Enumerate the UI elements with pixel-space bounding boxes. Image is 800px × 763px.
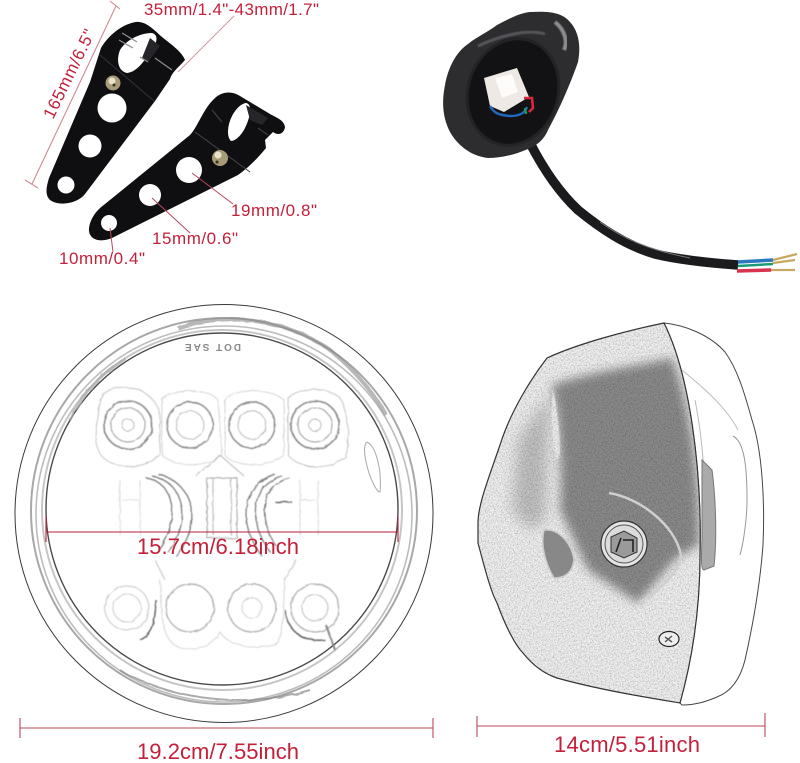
dimension: clamp diameter: 35mm/1.4"-43mm/1.7" — [144, 0, 319, 19]
side slot — [365, 442, 380, 492]
LED modules: top row — [96, 387, 348, 467]
bracket: right — [89, 93, 285, 240]
panel: headlight side view — [470, 315, 764, 715]
text: DOT SAE mark: DOT SAE — [185, 341, 241, 352]
dimension: bracket length — [25, 1, 120, 188]
mount bolt — [601, 521, 647, 567]
LED modules: bottom row — [105, 560, 339, 650]
dimension: depth: 14cm/5.51inch — [554, 732, 700, 757]
dimension: bracket length: 165mm/6.5" — [40, 26, 99, 122]
reflector contour — [609, 493, 681, 602]
dimension: overall diameter — [20, 718, 433, 763]
panel: headlight front view — [15, 304, 433, 722]
dimension: 10mm hole — [59, 228, 145, 268]
grommet opening — [454, 27, 572, 157]
dimension: 10mm hole: 10mm/0.4" — [59, 249, 145, 268]
panel: rubber grommet and wiring — [443, 12, 797, 271]
dimension: clamp diameter — [144, 0, 319, 72]
shell recess — [543, 530, 574, 578]
dimension: lens diameter — [46, 516, 398, 559]
bracket: left — [46, 22, 185, 204]
dimension: lens diameter: 15.7cm/6.18inch — [137, 534, 299, 559]
connector: white plug — [484, 68, 533, 116]
screw: left bracket — [106, 76, 120, 90]
small screw — [659, 632, 679, 646]
cable — [530, 143, 797, 271]
projector lens arcs and centre module — [120, 455, 318, 556]
screw: right bracket — [212, 150, 228, 166]
dimension: 19mm hole — [192, 173, 317, 220]
shell body — [477, 322, 701, 704]
grommet body — [443, 12, 579, 158]
dimension: 19mm hole: 19mm/0.8" — [231, 201, 317, 220]
dimension: depth — [477, 713, 765, 757]
bezel glint — [701, 460, 716, 570]
dimension: 15mm hole: 15mm/0.6" — [152, 229, 238, 248]
headlight rim — [15, 304, 433, 722]
dimension: 15mm hole — [152, 198, 238, 248]
panel: mounting brackets — [46, 22, 285, 240]
front bezel — [664, 323, 764, 705]
